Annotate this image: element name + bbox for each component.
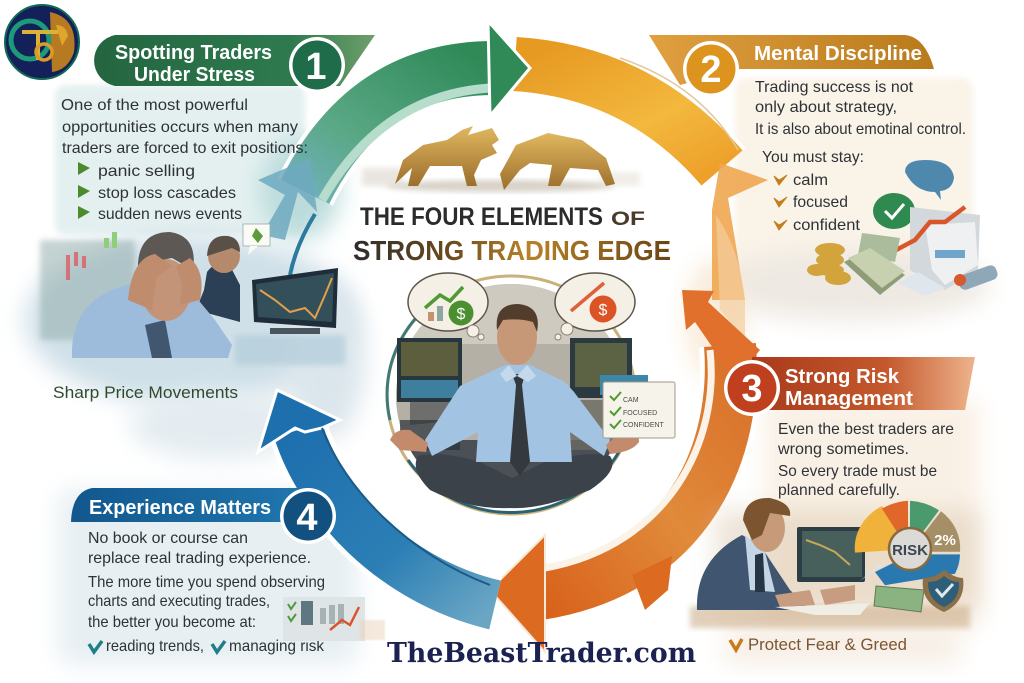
text block 1: panic selling — [98, 163, 195, 180]
thought bubble: loss — [555, 273, 635, 340]
heading banner 1: Under Stress — [134, 64, 255, 86]
badge 3 — [724, 360, 780, 416]
icon: golden bull and bear — [362, 126, 640, 192]
icon: shield — [923, 570, 963, 612]
text block 4: managing risk — [229, 638, 325, 655]
shirt — [425, 365, 610, 462]
panel: step 1 spotting traders — [40, 35, 375, 402]
icon: mini chart — [283, 597, 385, 641]
icon: logo — [5, 5, 79, 79]
text block 3: Even the best traders are — [778, 421, 954, 438]
hands — [390, 430, 428, 452]
website url: TheBeastTrader.com — [387, 638, 696, 669]
scene background — [396, 284, 613, 478]
illustration: money and brain — [807, 160, 999, 296]
badge 1 — [289, 37, 345, 93]
title: STRONG TRADING EDGE — [353, 235, 671, 266]
badge 2: 2 — [700, 49, 722, 91]
text block 2: only about strategy, — [755, 99, 897, 116]
heading banner 2 — [649, 35, 934, 85]
chart: risk gauge: 2% — [934, 532, 956, 549]
text block 1 — [61, 97, 308, 223]
text block 4: charts and executing trades, — [88, 593, 270, 610]
heading banner 4: Experience Matters — [89, 497, 271, 519]
text block 2: calm — [793, 172, 828, 189]
badge 1: 1 — [305, 46, 327, 88]
title — [353, 203, 671, 266]
tie — [510, 374, 530, 476]
monitors — [397, 338, 632, 450]
text block 3 — [777, 421, 954, 499]
text block 3: So every trade must be — [778, 463, 937, 480]
thought bubble: profit — [408, 273, 488, 340]
panel: step 4 experience — [71, 488, 385, 655]
heading banner 3 — [752, 357, 975, 410]
caption: Sharp Price Movements — [53, 383, 238, 402]
arrow 1: green — [258, 21, 530, 275]
arrow 2: gold — [515, 58, 768, 340]
text block 1: sudden news events — [98, 206, 242, 223]
text block 1: stop loss cascades — [98, 185, 236, 202]
panel: step 2 mental discipline — [649, 35, 999, 296]
heading banner 2: Mental Discipline — [754, 43, 922, 65]
text block 4: replace real trading experience. — [88, 550, 311, 567]
heading banner 3: Strong Risk — [785, 366, 900, 388]
clipboard: CONFIDENT — [623, 422, 665, 429]
chart: risk gauge — [855, 501, 960, 585]
badge 3: 3 — [741, 368, 763, 410]
clipboard — [600, 375, 675, 438]
arrow 3: orange — [490, 290, 760, 652]
text block 4: reading trends, — [106, 638, 204, 655]
text block 4: No book or course can — [88, 530, 248, 547]
arrow 4: blue — [258, 390, 495, 605]
panel: meditating trader — [387, 273, 675, 514]
text block 1: opportunities occurs when many — [62, 119, 298, 136]
text block 2: confident — [793, 217, 861, 234]
heading banner 3: Management — [785, 388, 913, 410]
text block 1: One of the most powerful — [61, 97, 248, 114]
title: THE FOUR ELEMENTS — [360, 203, 603, 231]
text block 4: The more time you spend observing — [88, 574, 325, 591]
panel: step 3 risk management — [690, 357, 980, 654]
legs — [416, 454, 612, 508]
illustration: stressed traders — [40, 224, 345, 365]
protect line: Protect Fear & Greed — [748, 636, 907, 654]
clipboard: CAM — [623, 397, 639, 404]
text block 2: You must stay: — [762, 149, 864, 166]
clipboard: FOCUSED — [623, 410, 657, 417]
badge 4: 4 — [296, 497, 318, 539]
badge 4 — [280, 488, 336, 544]
chart: risk gauge: RISK — [892, 542, 928, 559]
thought bubble: profit: $ — [457, 306, 466, 323]
text block 2 — [755, 79, 966, 234]
text block 2: It is also about emotinal control. — [755, 121, 966, 138]
text block 4: the better you become at: — [88, 614, 256, 631]
text block 4 — [88, 530, 325, 655]
text block 3: planned carefully. — [778, 482, 900, 499]
illustration: trader at desk — [690, 498, 980, 628]
text block 1: traders are forced to exit positions: — [62, 140, 308, 157]
title: OF — [611, 209, 645, 230]
badge 2 — [683, 41, 739, 97]
head — [497, 309, 537, 365]
heading banner 1: Spotting Traders — [115, 42, 272, 64]
heading banner 4 — [71, 488, 300, 522]
thought bubble: loss: $ — [599, 302, 608, 319]
text block 2: Trading success is not — [755, 79, 914, 96]
text block 2: focused — [793, 194, 848, 211]
heading banner 1 — [94, 35, 375, 86]
text block 3: wrong sometimes. — [777, 441, 909, 458]
